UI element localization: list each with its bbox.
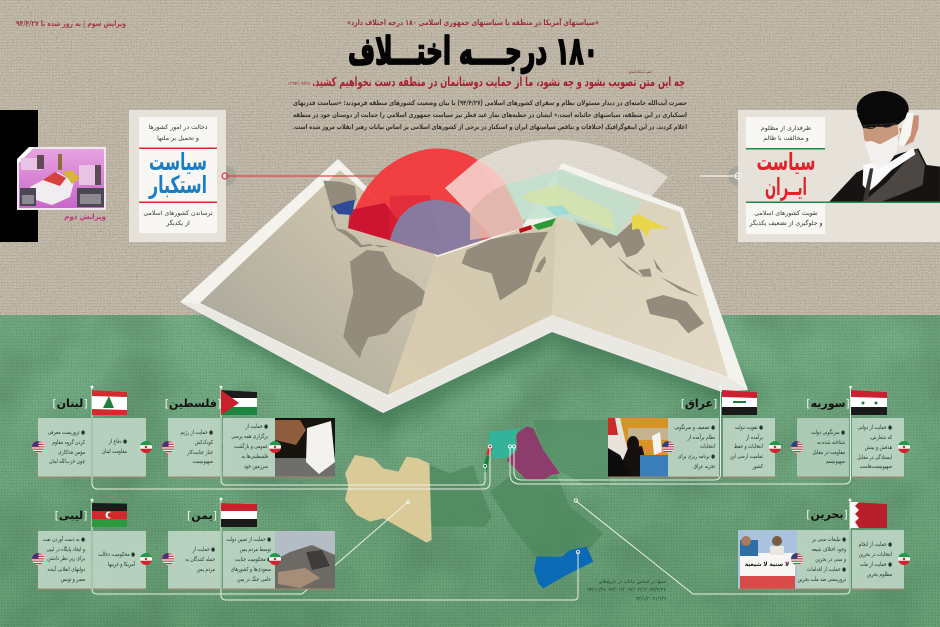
iraq iran text: برآمده از: [745, 433, 763, 441]
connector dots: [91, 386, 852, 501]
syria usa text: [811, 428, 846, 465]
lebanon icons: [32, 441, 152, 453]
libya right cell: [93, 531, 146, 589]
continent: africa: [462, 232, 548, 301]
left card: frame: [129, 110, 226, 242]
iraq photo: [608, 418, 668, 477]
subtitle quote: چه این متن تصویب بشود و چه نشود، ما از حمایت دوستانمان در منطقه دست نخواهیم کشید.: [312, 74, 685, 89]
eurasia country tints: [520, 184, 616, 232]
bahrain usa text: ● تبلیغات مبنی بر: [811, 537, 847, 543]
intro paragraph: استکباری در این منطقه، سیاستهای خائنانه است.» ایشان در خطبه‌های نماز عید فطر نیز سیاست جمهوری اسلامی را حمایت از دوستان خود در منطقه: [293, 111, 687, 119]
left card: inner: [139, 117, 217, 233]
intro paragraph: اعلام کردند. در این اینفوگرافیک اختلافات و تناقض سیاستهای ایران و استکبار در برخی از کشورهای اسلامی بر اساس بیانات رهبر انقلاب مرور شده است.: [293, 123, 687, 131]
bahrain iran text: انتخابات در بحرین: [859, 552, 892, 558]
right card: tab: [728, 166, 748, 186]
yemen iran text: ● محکومیت جنایت: [235, 557, 272, 563]
iraq usa text: تجزیه عراق: [693, 464, 716, 470]
left card: title: سیاست: [149, 148, 207, 176]
lebanon usa text: چون حزب‌الله لبنان: [49, 459, 85, 465]
iraq bottom borders: [608, 476, 775, 478]
palestine usa text: [181, 430, 214, 465]
right card: frame: [738, 110, 940, 242]
top quote: «سیاستهای آمریکا در منطقه با سیاستهای جمهوری اسلامی ۱۸۰ درجه اختلاف دارد»: [347, 17, 599, 27]
iraq iran text: کشور: [752, 464, 764, 470]
panel: yemen: [162, 503, 335, 589]
syria right cell: [852, 418, 904, 477]
panel: iraq: [608, 390, 781, 477]
palestine usa text: جبار جنایت‌کار: [186, 450, 213, 456]
yemen usa text: مردم یمن: [197, 567, 215, 573]
libya usa text: [43, 535, 86, 583]
panel: syria: [791, 390, 910, 477]
yemen usa text: حمله کنندگان به: [185, 555, 215, 563]
yellow region: [632, 214, 670, 237]
yemen flag: [221, 503, 257, 527]
palestine flag: [221, 390, 257, 415]
left card: top text: دخالت در امور کشورها: [148, 124, 208, 131]
palestine iran text: [231, 424, 269, 470]
yemen usa text: ● حمایت از: [192, 547, 216, 553]
syria flag: [851, 390, 887, 415]
libya usa text: و ایجاد پایگاه در لیبی: [46, 545, 85, 553]
syria bottom borders: [797, 476, 904, 478]
source note: ۹۱/۶/۹، ۹۲/۱/۲: [636, 596, 666, 602]
syria iran text: ● حمایت از دولتی: [857, 425, 893, 431]
bahrain bottom borders: [738, 588, 904, 590]
bahrain left cell: [797, 530, 849, 589]
palestine name: [فلسطین]: [165, 397, 221, 410]
iraq iran text: انتخابات و حفظ: [734, 444, 763, 450]
bahrain usa text: [798, 537, 847, 583]
iraq usa text: ● برنامه ریزی برای: [678, 454, 716, 460]
syria name: [سوریه]: [806, 397, 850, 410]
black side tab: [0, 110, 38, 242]
thumbnail caption: ویرایش دوم: [64, 213, 106, 221]
iraq usa text: نظام برآمده از: [687, 433, 715, 441]
palestine right cell: [223, 418, 275, 477]
left card: tab: [216, 166, 236, 186]
bahrain usa text: تروریستی ضد ملت بحرین: [798, 577, 847, 583]
subtitle attribution: (حضرت آیت‌الله خامنه‌ای): [628, 69, 652, 74]
background: green ground: [0, 315, 940, 627]
syria left cell: [797, 418, 849, 477]
background: paper: [0, 0, 940, 316]
regional map: [345, 420, 610, 588]
dark blue america: [332, 200, 355, 215]
bahrain iran text: ● حمایت از انجام: [859, 542, 893, 548]
pink fan overlay: [445, 160, 523, 237]
palestine bottom borders: [168, 476, 335, 478]
panel: bahrain: [738, 502, 910, 589]
lebanon usa text: کردن گروه مقاوم: [52, 438, 86, 446]
libya name: [لیبی]: [55, 509, 87, 522]
title: ۱۸۰ درجــــه اختـــلاف: [348, 29, 598, 73]
source note: منبع: بر اساس بیانات در تاریخ‌های: [599, 579, 666, 585]
yemen left cell: [168, 531, 220, 589]
lebanon right cell: [93, 418, 146, 477]
subtitle date: ۱۳۹۴/۰۴/۲۷: [288, 81, 311, 87]
continent: australia: [646, 295, 704, 333]
lebanon iran text: [102, 439, 128, 455]
right card: title: سیاست: [756, 148, 816, 176]
bahrain usa text: وجود اختلاف شیعه: [812, 547, 846, 553]
folded world map: [180, 159, 748, 413]
yemen photo: [275, 531, 335, 589]
panel: lebanon: [32, 390, 152, 477]
map: continents: [323, 181, 704, 358]
yemen icons: [162, 553, 281, 565]
palestine iran text: سرزمین خود: [244, 464, 268, 470]
palestine photo: [275, 418, 335, 477]
yemen iran text: [226, 537, 272, 583]
yemen usa text: [185, 547, 216, 573]
right card: lower box: [746, 203, 825, 234]
libya iran text: ● محکومیت دخالت: [98, 552, 136, 558]
map: left panel: [200, 170, 437, 395]
syria usa text: ● سرنگونی دولت: [811, 428, 846, 436]
map shadow: [195, 310, 760, 430]
region: egypt: [430, 465, 492, 527]
yemen iran text: ● حمایت از تعیین دولت: [226, 537, 272, 543]
bahrain icons: [791, 553, 910, 565]
right card: upper rule: [746, 148, 825, 150]
right policy card: [728, 91, 940, 242]
yemen iran text: توسط مردم یمن: [240, 547, 272, 553]
lebanon usa text: مؤمن فداکاری: [58, 450, 85, 456]
libya left cell: [38, 531, 91, 589]
palestine usa text: کودک‌کش: [195, 438, 214, 446]
libya iran text: [98, 552, 136, 568]
connector rings: [406, 445, 580, 554]
iraq left cell: [668, 418, 719, 477]
map: right panel: [552, 170, 728, 377]
region: yemen: [534, 547, 593, 588]
dome overlay: [390, 200, 482, 255]
pink fan inner: [470, 184, 523, 240]
bahrain flag: [850, 502, 887, 528]
syria usa text: صهیونیسم: [826, 459, 845, 465]
syria iran text: که شعارش،: [870, 435, 893, 441]
lebanon name: [لبنان]: [52, 397, 88, 410]
yemen bottom borders: [168, 588, 335, 590]
white connector: [700, 173, 741, 179]
islands: indonesia: [617, 256, 700, 297]
yemen name: [یمن]: [187, 509, 217, 522]
right card: lower text: تقویت کشورهای اسلامی: [754, 210, 818, 217]
bahrain usa text: و سنی در بحرین: [815, 557, 846, 563]
island: madagascar: [535, 256, 546, 273]
iraq usa text: ● تضعیف و سرنگونی: [674, 423, 716, 431]
red connector: [222, 173, 377, 179]
iraq usa text: انتخابات: [700, 444, 715, 450]
lebanon iran text: مقاومت لبنان: [102, 449, 127, 455]
yemen right cell: [223, 531, 275, 589]
map: middle panel: [388, 217, 558, 395]
right policy card: ایــران: [765, 173, 807, 201]
lebanon usa text: ● تروریست معرفی: [48, 430, 86, 436]
map: white border: [180, 159, 748, 413]
header edition note: ویرایش سوم | به روز شده تا ۹۴/۴/۲۷: [16, 19, 126, 29]
panel: libya: [32, 503, 152, 589]
bahrain iran text: [859, 542, 893, 578]
bahrain photo: لا سنية لا شيعية: [745, 562, 789, 568]
intro paragraph: حضرت آیت‌الله خامنه‌ای در دیدار مسئولان نظام و سفرای کشورهای اسلامی (۹۴/۴/۲۷) با بیان وضعیت کشورهای منطقه فرمودند: «سیاست قدرتهای: [293, 98, 687, 107]
lebanon left cell: [38, 418, 91, 477]
continent: asia: [573, 218, 645, 257]
iraq name: [عراق]: [681, 397, 717, 410]
green strip: [533, 218, 556, 230]
palestine iran text: ● حمایت از: [245, 424, 269, 430]
lebanon iran text: ● دفاع از: [108, 439, 128, 445]
iraq iran text: [730, 425, 764, 470]
iraq right cell: [723, 418, 775, 477]
yemen iran text: سعودی‌ها و کشورهای: [231, 567, 271, 573]
bahrain right cell: [852, 530, 904, 589]
syria icons: [791, 441, 910, 453]
left card: bottom rule: [139, 202, 217, 203]
right policy card: و مخالفت با ظالم: [763, 135, 809, 142]
syria iran text: ایستادگی در مقابل: [857, 453, 892, 461]
iraq usa text: [674, 423, 716, 470]
region: iraq: [507, 427, 560, 480]
right policy card: و جلوگیری از تضعیف یکدیگر: [748, 219, 822, 227]
iraq icons: [662, 441, 781, 453]
syria iran text: [857, 425, 893, 470]
palestine usa text: صهیونیست: [193, 459, 213, 465]
lebanon usa text: [48, 430, 86, 465]
region: lebanon: [486, 445, 492, 455]
region: arabia: [490, 475, 603, 558]
cream fan behind the map: [478, 140, 668, 220]
palestine iran text: فلسطینی‌ها به: [241, 454, 268, 460]
libya iran text: آمریکا و غربیها: [108, 560, 136, 568]
bahrain name: [بحرین]: [806, 508, 848, 521]
libya bottom borders: [38, 588, 146, 590]
bahrain iran text: ● حمایت از ملت: [860, 562, 893, 568]
iraq iran text: تمامیت ارضی این: [730, 454, 764, 460]
left policy card: و تحمیل بر ملتها: [157, 135, 199, 142]
bahrain photo: [738, 530, 797, 589]
connector lines: [92, 387, 850, 600]
source note: ۹۴/۴/۲۷، ۹۴/۰۳/۱۴، ۹۴/۰۱/۲، ۹۳/۱۱/۲۸: [587, 587, 666, 593]
libya usa text: مصر و تونس: [61, 577, 85, 583]
left policy card: از یکدیگر: [165, 219, 190, 227]
left card: top rule: [139, 148, 217, 149]
palestine iran text: عمومی و بازگشت: [234, 442, 268, 450]
left policy card: [129, 110, 236, 242]
iraq iran text: ● تقویت دولت: [735, 425, 764, 431]
palestine icons: [162, 441, 281, 453]
region: libya: [345, 455, 432, 543]
translucent green eurasia: [505, 169, 643, 236]
right card: lower rule: [746, 202, 940, 203]
lebanon bottom borders: [38, 476, 146, 478]
iraq flag: [722, 390, 757, 415]
left policy card: استکبار: [148, 171, 207, 199]
palestine left cell: [168, 418, 220, 477]
syria usa text: شناخته شده به: [817, 440, 845, 446]
right card: upper box: [746, 117, 825, 148]
region: iran: [533, 420, 610, 487]
region: palestine: [483, 455, 489, 472]
bahrain usa text: ● حمایت از اقدامات: [807, 567, 847, 573]
palestine iran text: برگزاری همه پرسی: [231, 432, 268, 440]
panel: palestine: [162, 390, 335, 477]
libya usa text: دولتهای انقلابی آینده: [47, 565, 85, 573]
continent: south america: [343, 250, 425, 358]
map: lower edge shade: [180, 302, 748, 413]
left card: bottom text: ترساندن کشورهای اسلامی: [143, 210, 213, 217]
libya usa text: ● به دست آوردن نفت: [43, 535, 86, 543]
syria iran text: هدفش و بینش: [865, 445, 892, 451]
right card: upper text: طرفداری از مظلوم: [761, 125, 811, 132]
libya usa text: برای زیر نظر داشتن: [47, 556, 85, 562]
portrait: leader: [829, 91, 940, 202]
palestine usa text: ● حمایت از رژیم: [181, 430, 214, 436]
lebanon flag: [92, 390, 127, 415]
libya flag: [92, 503, 127, 527]
red strip: [519, 225, 532, 233]
bahrain iran text: مظلوم بحرین: [867, 572, 892, 578]
thumbnail: second edition: [17, 147, 106, 210]
libya icons: [32, 553, 152, 565]
source note: [587, 579, 666, 602]
red fan: imperialism: [348, 148, 492, 255]
darker usa band on red fan: [348, 195, 440, 240]
region: syria: [488, 428, 521, 458]
intro paragraph: [293, 98, 687, 131]
syria usa text: مقاومت در مقابل: [812, 450, 845, 456]
yemen iran text: حامی جنگ در یمن: [237, 575, 271, 583]
syria iran text: صهیونیست‌هاست: [860, 464, 892, 470]
continent: north america: [323, 181, 388, 247]
